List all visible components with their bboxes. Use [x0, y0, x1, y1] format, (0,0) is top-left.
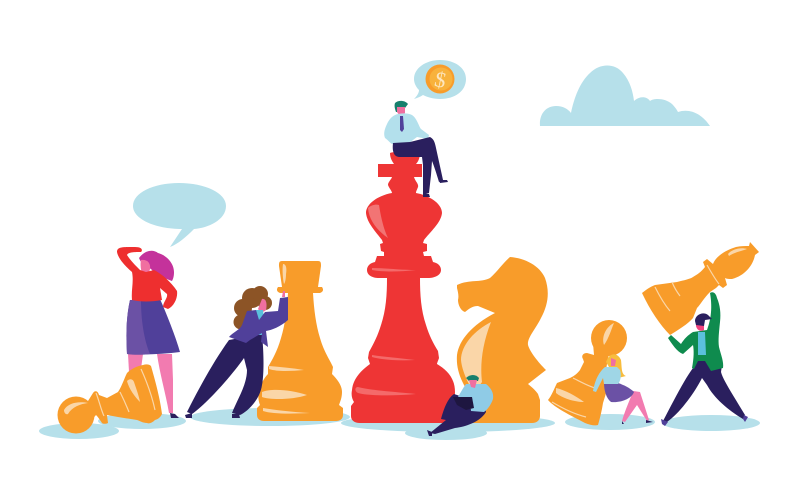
hair: [234, 286, 272, 330]
woman: pushing rook: [185, 286, 288, 418]
tie: [400, 116, 404, 132]
dollar sign: $: [432, 66, 448, 93]
face: [397, 107, 405, 115]
top and arm: [593, 367, 621, 392]
ground shadows: [39, 408, 760, 440]
highlight: knight neck: [461, 322, 491, 393]
chess piece: fallen pawn: [58, 364, 162, 434]
skirt: [604, 383, 634, 402]
skirt: [126, 299, 180, 354]
shoe: [427, 430, 432, 436]
book: [453, 397, 474, 410]
shoes: [185, 413, 240, 418]
speech bubble: dollar coin: [414, 60, 466, 99]
hair: [466, 375, 479, 381]
chess piece: rook: [257, 261, 343, 421]
highlight: crown: [368, 205, 388, 238]
shoe: [170, 413, 179, 418]
highlights: pawn: [64, 402, 88, 414]
hair: [695, 313, 712, 326]
green jacket and arms: [668, 292, 723, 371]
shirt: [698, 332, 706, 355]
highlights: rook: [283, 264, 286, 284]
legs: [128, 354, 143, 372]
shoes: [661, 415, 748, 426]
cloud: [540, 66, 710, 126]
face: [141, 260, 150, 274]
hair: [395, 101, 408, 112]
shirt: [254, 310, 266, 335]
shoes: [423, 180, 448, 197]
trousers and legs: [430, 394, 486, 434]
face: [469, 380, 477, 388]
shirt: [458, 384, 493, 412]
shoes: [622, 420, 653, 424]
man: sitting against knight: [427, 375, 493, 436]
legs: [663, 357, 745, 422]
speech bubble: left: [133, 183, 226, 247]
jacket: [229, 297, 288, 347]
hand: [282, 291, 285, 297]
man: sitting on king: [384, 101, 448, 197]
face: [258, 299, 267, 312]
chess piece: king: [351, 152, 455, 423]
hair: [606, 354, 626, 378]
icon: coin: [426, 64, 454, 94]
man: lifting bishop: [642, 242, 759, 426]
chess piece: tilted pawn: [548, 320, 627, 425]
legs: [187, 334, 264, 415]
shirt: [384, 113, 429, 144]
highlights: tilted pawn: [603, 323, 614, 345]
highlights: bishop: [728, 248, 747, 256]
woman: sitting on pawn: [593, 354, 653, 424]
hair: [139, 251, 174, 281]
top and arms: [117, 247, 177, 309]
legs: [622, 391, 649, 422]
face: [611, 358, 616, 366]
chess piece: bishop: [642, 242, 759, 335]
trousers and legs: [393, 137, 443, 193]
woman: standing with hand on head: [117, 247, 180, 418]
chess piece: knight: [457, 257, 548, 423]
face: [696, 321, 704, 331]
